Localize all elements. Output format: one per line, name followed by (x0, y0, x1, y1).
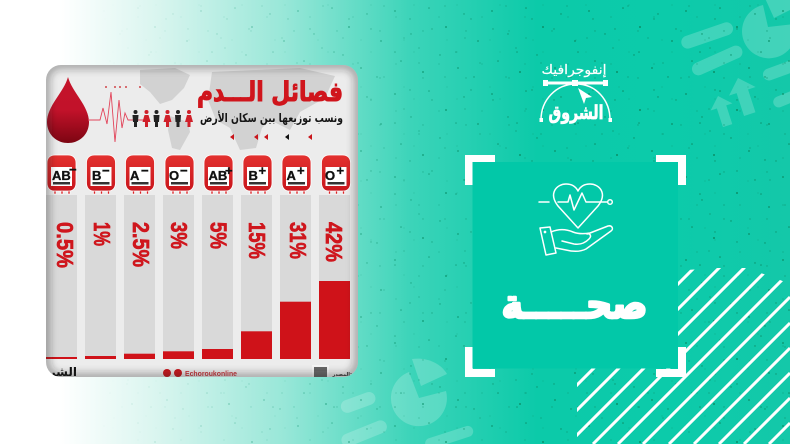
bag: A- (126, 155, 154, 194)
header dots (105, 86, 141, 88)
bag: O+: O (325, 168, 335, 183)
bag: B+ (243, 155, 272, 194)
category title: صحـــــة (502, 280, 648, 328)
people row (132, 110, 193, 127)
logo label: إنفوجرافيك (542, 63, 606, 78)
map markers (230, 134, 312, 140)
percent labels: 15% (244, 222, 270, 259)
bag: O+ (322, 155, 350, 194)
logo cursor (578, 88, 592, 104)
percent labels: 0.5% (52, 222, 78, 268)
bag: O+: + (336, 163, 344, 178)
percent labels: 42% (321, 222, 347, 262)
decoration: bottom pie and pills (339, 359, 475, 444)
bag: AB+: + (225, 163, 233, 178)
card vignette (46, 65, 358, 377)
world map (140, 68, 335, 150)
logo name: الشروق (548, 102, 604, 124)
social icons (163, 369, 182, 377)
handle: Echoroukonline (185, 369, 237, 378)
logo arc (541, 84, 610, 120)
panel: category box (465, 155, 686, 377)
bag: AB- (47, 155, 77, 194)
bag: O-: O (169, 168, 179, 183)
bag: A+ (282, 155, 311, 194)
footer (52, 365, 352, 377)
title: فصائل الـــدم (197, 77, 343, 108)
logo (540, 63, 612, 124)
icon: heart in hand (539, 184, 612, 255)
bag: A+: A (286, 168, 296, 183)
bag: AB+ (204, 155, 233, 194)
subtitle: ونسب توزيعها بين سكان الأرض (200, 110, 343, 126)
bag: A-: − (141, 163, 149, 178)
infographic card (31, 65, 358, 380)
card paper (46, 65, 358, 377)
percent labels: 2.5% (128, 222, 154, 267)
bag: B- (86, 155, 116, 194)
drop (47, 77, 89, 143)
source: المصدر: (331, 372, 352, 378)
footer logo text: الشروق (31, 365, 77, 380)
columns (46, 195, 350, 359)
bag: B+: B (248, 168, 258, 183)
bag: A-: A (130, 168, 140, 183)
percent labels: 5% (206, 222, 232, 249)
percent labels: 31% (285, 222, 311, 259)
bag: AB-: AB (52, 168, 71, 183)
qr code (312, 365, 329, 378)
bag: B+: + (258, 163, 266, 178)
bag: A+: + (297, 163, 305, 178)
bag: B-: B (92, 168, 101, 183)
bag: O- (165, 155, 194, 194)
percent labels: 3% (166, 222, 192, 249)
bar chart (46, 281, 350, 359)
decoration: diagonal stripes (577, 268, 790, 444)
decoration: top right chart shapes (680, 0, 790, 129)
corner brackets (465, 155, 686, 377)
bag: O-: − (180, 163, 188, 178)
pulse line (88, 92, 150, 142)
percent labels (52, 222, 347, 268)
bag: AB+: AB (208, 168, 227, 183)
percent labels: 1% (89, 222, 115, 246)
bag: B-: − (102, 163, 110, 178)
bag: AB-: − (69, 162, 77, 177)
